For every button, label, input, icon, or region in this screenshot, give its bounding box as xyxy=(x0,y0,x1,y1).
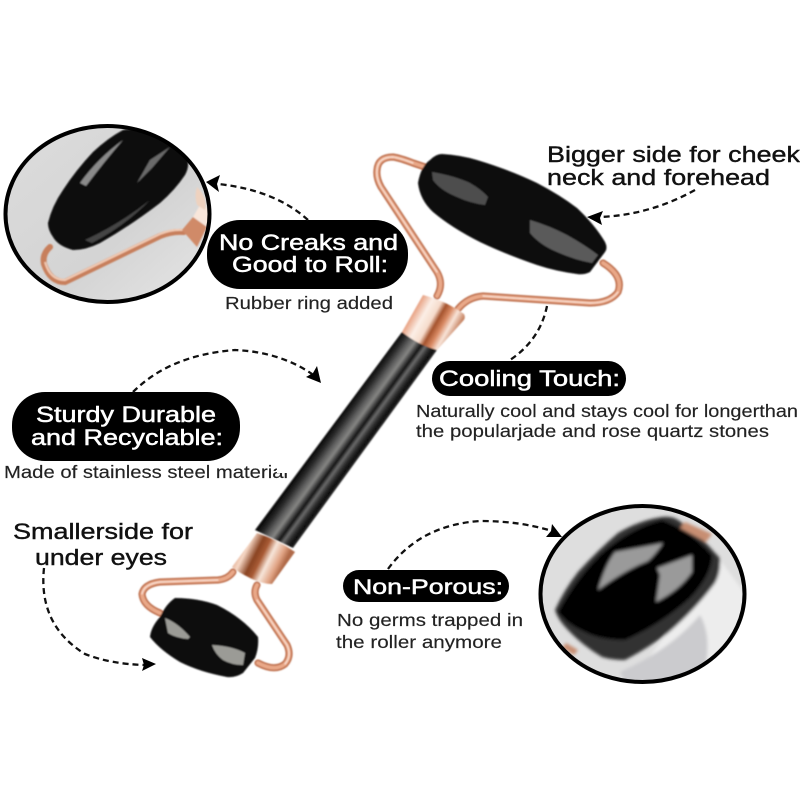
small roller stone xyxy=(150,598,258,677)
top wire frame right xyxy=(458,263,619,309)
callout: Non-Porous xyxy=(343,570,509,602)
arrow: sturdy to handle xyxy=(133,350,321,392)
mask: handle edge clipping the caption xyxy=(277,460,300,473)
arrow: smaller side to small roller xyxy=(43,568,156,671)
text: Rubber ring added: Rubber ring added xyxy=(225,293,393,313)
heading: bigger side: neck and forehead xyxy=(547,165,770,190)
top collar xyxy=(402,295,465,350)
callout: No Creaks and Good to Roll: Good to Roll: xyxy=(232,252,388,277)
callout image: roller detail top left xyxy=(6,126,212,302)
callout: No Creaks and Good to Roll: No Creaks and xyxy=(219,230,398,255)
callout: Sturdy Durable and Recyclable xyxy=(12,392,240,461)
callout: Sturdy Durable and Recyclable: Sturdy Durable xyxy=(36,402,216,427)
callout: Cooling Touch xyxy=(432,361,626,396)
heading: bigger side xyxy=(547,142,800,190)
handle xyxy=(255,332,437,548)
callout: Non-Porous: Non-Porous: xyxy=(353,576,503,599)
heading: smaller side: Smallerside for xyxy=(13,519,194,544)
text: non-porous description: No germs trapped in xyxy=(337,610,523,630)
callout: Cooling Touch: Cooling Touch: xyxy=(439,366,620,391)
arrow: no creaks to detail circle xyxy=(206,175,308,220)
arrow: cooling touch to frame xyxy=(510,306,547,360)
text: non-porous description: the roller anymore xyxy=(336,632,502,652)
bottom wire frame xyxy=(142,572,289,668)
bottom collar xyxy=(232,533,295,584)
callout: Sturdy Durable and Recyclable: and Recyclable: xyxy=(31,425,223,450)
callout: No Creaks and Good to Roll xyxy=(207,220,408,289)
text: Made of stainless steel material: Made of stainless steel material xyxy=(4,462,288,482)
text: non-porous description xyxy=(336,610,523,652)
text: cooling description xyxy=(416,401,798,441)
heading: smaller side xyxy=(13,519,194,570)
large roller stone xyxy=(418,154,606,274)
heading: bigger side: Bigger side for cheek xyxy=(547,142,800,167)
top wire frame left xyxy=(377,157,440,296)
arrow: non-porous to stone circle xyxy=(388,521,562,569)
heading: smaller side: under eyes xyxy=(35,545,167,570)
text: cooling description: the popularjade and rose quartz stones xyxy=(416,421,769,441)
text: cooling description: Naturally cool and stays cool for longerthan xyxy=(416,401,798,421)
arrow: bigger side to roller xyxy=(587,190,695,225)
callout image: stone detail bottom right xyxy=(540,506,750,690)
product: jade roller xyxy=(142,154,619,677)
